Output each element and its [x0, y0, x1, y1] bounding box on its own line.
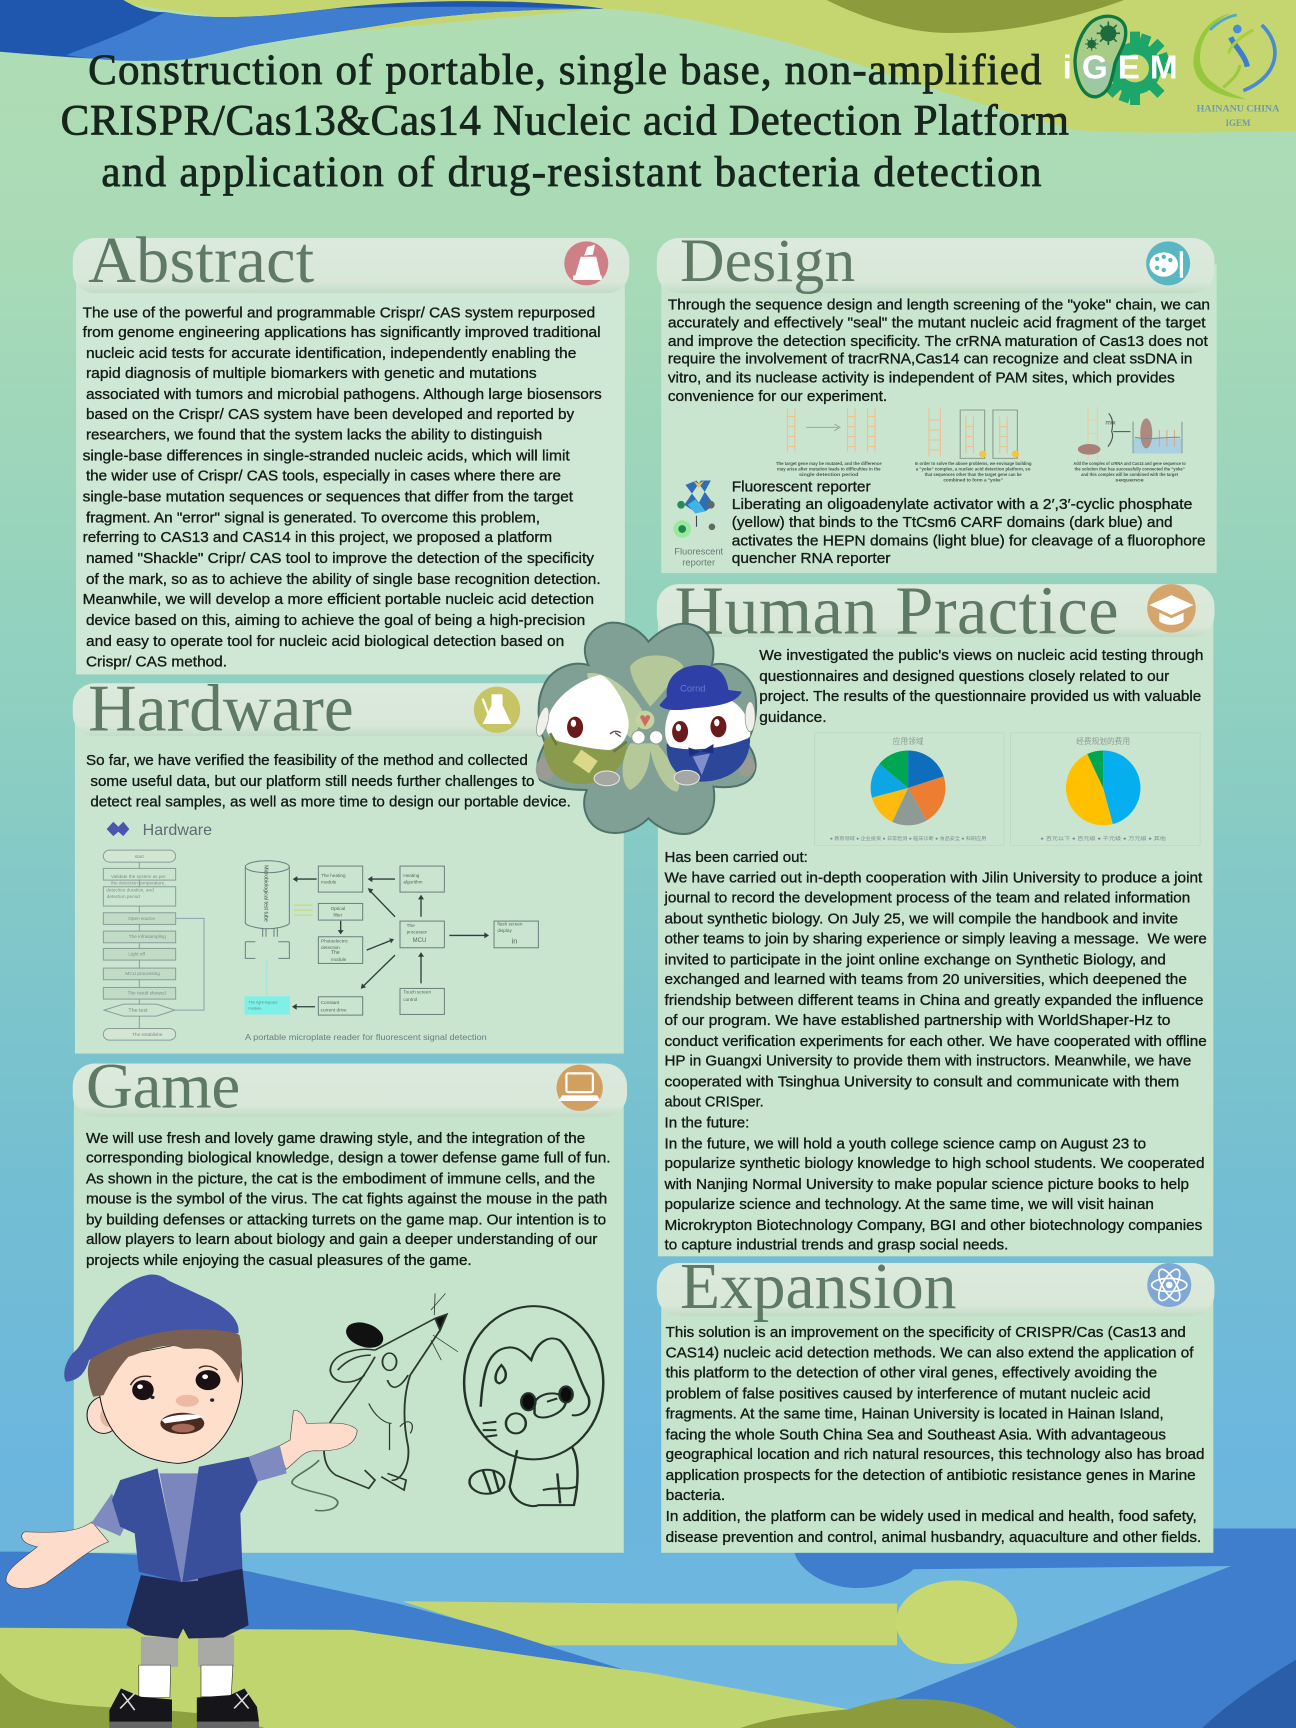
logo: Hainanu China iGEM: IGEM: [1226, 118, 1251, 128]
logo: iGEM: iGEM: [1063, 49, 1178, 86]
text: design body: require the involvement of tracrRNA,Cas14 can recognize and cleat ssDNA in: [668, 351, 1192, 368]
block diagram: portable reader: algorithm: [403, 879, 423, 884]
text: hardware body: some useful data, but our platform still needs further challenges to: [90, 773, 534, 790]
block diagram: portable reader: processor: [407, 929, 428, 934]
text: abstract body: researchers, we found that the system lacks the ability to distinguish: [86, 427, 542, 444]
text: fluorescent reporter: quencher RNA reporter: [732, 550, 890, 567]
icon: book: [564, 241, 608, 285]
clover shape: [537, 623, 756, 834]
caption: step two: In order to solve the above problems, we envisage building: [915, 461, 1032, 467]
text: abstract body: nucleic acid tests for accurate identification, independently enabling the: [86, 345, 576, 362]
text: has been carried out: We have carried out in-depth cooperation with Jilin University to produce a joint: [665, 870, 1203, 887]
text: abstract body: Crispr/ CAS method.: [86, 654, 227, 671]
icon: graduation cap: [1147, 584, 1196, 633]
text: abstract body: of the mark, so as to achieve the ability of single base recognition detection.: [86, 571, 601, 588]
icon: flask: [474, 687, 520, 733]
text: design body: and improve the detection specificity. The crRNA maturation of Cas13 does not: [668, 333, 1209, 350]
block diagram: portable reader: Heating: [403, 873, 420, 878]
panel: hardware: [73, 671, 624, 1054]
text: abstract body: device based on this, aiming to achieve the goal of being a high-precision: [86, 612, 585, 629]
pie chart: budget use: [1011, 733, 1200, 845]
text: game body: As shown in the picture, the cat is the embodiment of immune cells, and the: [86, 1171, 595, 1188]
caption: step three: sequence: [1115, 479, 1144, 484]
caption: step three: and this complex will be combined with the target: [1081, 472, 1178, 478]
panel: design: [657, 227, 1217, 573]
text: fluorescent reporter: Fluorescent reporter: [732, 479, 871, 496]
text: in the future: to capture industrial trends and grasp social needs.: [665, 1237, 1008, 1254]
text: abstract body: The use of the powerful and programmable Crispr/ CAS system repurposed: [83, 304, 595, 321]
text: abstract body: rapid diagnosis of multiple biomarkers with genetic and mutations: [86, 365, 537, 382]
text: abstract body: fragment. An "error" signal is generated. To overcome this problem,: [86, 509, 540, 526]
text: expansion body: geographical location and rich natural resources, this technology also has broad: [666, 1446, 1205, 1463]
text: has been carried out: about synthetic biology. On July 25, we will compile the handbook and invite: [665, 911, 1178, 928]
text: expansion body: In addition, the platform can be widely used in medical and health, food safety,: [666, 1508, 1197, 1525]
block diagram: portable reader: in: [512, 936, 517, 945]
logo: iGEM: [1063, 16, 1178, 105]
pie chart: application fields: 应用领域: [893, 736, 924, 746]
mascots: heart and hands: [632, 711, 663, 744]
text: abstract body: referring to CAS13 and CAS14 in this project, we proposed a platform: [83, 529, 552, 546]
text: fluorescent reporter: Liberating an oligoadenylate activator with a 2′,3′-cyclic phosphate: [732, 496, 1192, 513]
mascots on clover: [534, 623, 756, 834]
text: expansion body: this platform to the detection of other viral genes, effectively avoiding the: [666, 1365, 1157, 1382]
heading: expansion: Expansion: [680, 1251, 957, 1323]
character: boy presenter: [6, 1274, 357, 1728]
block diagram: portable reader: [245, 861, 538, 1015]
block diagram: portable reader: Photoelectric: [321, 938, 349, 943]
text: has been carried out: of our program. We have established partnership with WorldShaper-Hz to: [665, 1012, 1170, 1029]
mascot: left character: [534, 675, 629, 786]
text: fluorescent reporter: [732, 479, 1206, 567]
text: has been carried out: journal to record the development process of the team and related information: [664, 890, 1190, 907]
flow chart steps: [103, 850, 204, 1040]
flow chart steps: MCU processing: [125, 971, 160, 976]
caption: step one: may arise after mutation leads to difficulties in the: [777, 467, 881, 473]
text: design body: vitro, and its nuclease activity is independent of PAM sites, which provides: [668, 369, 1175, 386]
text: game body: corresponding biological knowledge, design a tower defense game full of fun.: [86, 1150, 611, 1167]
block diagram: portable reader: Optical: [331, 906, 345, 911]
text: abstract body: from genome engineering applications has significantly improved traditional: [83, 324, 601, 341]
caption: step one: single detection period: [799, 472, 859, 478]
text: fluorescent reporter: (yellow) that binds to the TtCsm6 CARF domains (dark blue) and: [732, 514, 1173, 531]
text: design body: accurately and effectively "seal" the mutant nucleic acid fragment of the target: [668, 314, 1206, 331]
panel: abstract: [73, 224, 629, 674]
flow chart steps: detection period: [107, 894, 140, 899]
text: questionnaire intro: project. The results of the questionnaire provided us with valuable: [759, 688, 1201, 705]
heading: human practice: Human Practice: [674, 573, 1119, 649]
pie chart: budget use: 经费规划的费用: [1076, 736, 1130, 746]
flow chart steps: Validate the system as per: [111, 874, 166, 879]
block diagram: portable reader: detection: [321, 945, 340, 950]
logo: Hainanu China iGEM: [1193, 13, 1280, 128]
mascot: right character: Cornd: [680, 684, 706, 694]
text: game body: mouse is the symbol of the virus. The cat fights against the mouse in the path: [86, 1190, 607, 1207]
block diagram: portable reader: current drive: [321, 1007, 347, 1012]
logo: Hainanu China iGEM: HAINANU CHINA: [1197, 104, 1280, 114]
block diagram: portable reader: The light-bypass: [248, 999, 278, 1004]
heading: design: Design: [680, 227, 855, 295]
caption: step three: [1073, 461, 1186, 484]
boy head: [64, 1274, 242, 1463]
text: game body: projects while enjoying the casual pleasures of the game.: [86, 1252, 472, 1269]
icon: atom: [1147, 1263, 1191, 1307]
heading: game: Game: [86, 1051, 240, 1123]
text: has been carried out: exchanged and learned with teams from 20 universities, which deepened the: [665, 971, 1187, 988]
flow chart steps: the detection temperature,: [111, 880, 165, 885]
bottom decorative waves: [0, 1529, 1296, 1728]
illustration: mouse: [292, 1293, 458, 1511]
text: has been carried out: about CRISper.: [665, 1093, 764, 1110]
pie chart: application fields: [814, 733, 1004, 845]
caption: step three: the solution that has successfully connected the "yoke": [1074, 467, 1185, 473]
diagram title: Hardware: [143, 822, 212, 839]
heading: abstract: Abstract: [88, 224, 314, 297]
diagram: hardware flow chart: [103, 822, 538, 1042]
text: expansion body: This solution is an improvement on the specificity of CRISPR/Cas (Cas13 and: [666, 1324, 1186, 1341]
text: fluorescent reporter: activates the HEPN domains (light blue) for cleavage of a fluorophore: [732, 533, 1206, 550]
text: game body: [86, 1130, 611, 1269]
block diagram: portable reader: Microbiological test tube: [263, 865, 269, 922]
panel: human practice: [657, 573, 1214, 1256]
pie chart: budget use: ● 百元以下 ● 百元级 ● 千元级 ● 万元级 ● 其他: [1040, 835, 1166, 842]
icon: fluorescent reporter: reporter: [682, 557, 715, 567]
caption: step one: [776, 461, 882, 478]
caption: step two: a "yoke" complex, a nucleic acid detection platform, so: [916, 467, 1030, 473]
caption: step two: [915, 461, 1032, 484]
text: has been carried out: [664, 849, 1207, 1110]
text: has been carried out: conduct verification experiments for each other. We have cooperated with offline: [665, 1033, 1207, 1050]
text: design body: convenience for our experiment.: [668, 388, 887, 405]
text: game body: by building defenses or attacking turrets on the game map. Our intention is to: [86, 1211, 606, 1228]
text: abstract body: single-base mutation sequences or sequences that differ from the target: [83, 488, 574, 505]
text: hardware body: [86, 752, 571, 811]
caption: step three: Add the complex of crRNA and Cas14 and gene sequence to: [1073, 461, 1186, 467]
block diagram: portable reader: The: [331, 950, 340, 956]
text: expansion body: facing the whole South China Sea and Southeast Asia. With advantageous: [666, 1426, 1166, 1443]
text: abstract body: the wider use of Crispr/ CAS tools, especially in cases where there are: [86, 467, 561, 484]
text: expansion body: application prospects for the detection of antibiotic resistance genes in Marine: [666, 1467, 1196, 1484]
block diagram: portable reader: The heating: [321, 873, 346, 878]
text: has been carried out: Has been carried out:: [665, 849, 808, 866]
text: has been carried out: friendship between different teams in China and greatly expanded the influence: [665, 992, 1203, 1009]
text: in the future: popularize science and technology. At the same time, we will visit hainan: [665, 1196, 1154, 1213]
text: in the future: popularize synthetic biology knowledge to high school students. We cooperated: [665, 1155, 1205, 1172]
flow chart steps: The test: [128, 1008, 148, 1014]
block diagram: portable reader: MCU: [413, 938, 426, 944]
text: in the future: Microkrypton Biotechnology Company, BGI and other biotechnology companies: [665, 1217, 1202, 1234]
diagram caption: A portable microplate reader for fluorescent signal detection: [245, 1032, 487, 1042]
text: in the future: [664, 1114, 1205, 1254]
boy shorts: [126, 1568, 249, 1638]
block diagram: portable reader: Constant: [321, 1000, 340, 1005]
text: questionnaire intro: questionnaires and designed questions closely related to our: [759, 668, 1169, 685]
text: expansion body: [666, 1324, 1205, 1546]
text: expansion body: CAS14) nucleic acid detection methods. We can also extend the application of: [666, 1345, 1194, 1362]
icon: palette: [1146, 241, 1190, 285]
top decorative waves: [0, 0, 1296, 133]
text: has been carried out: invited to participate in the joint online exchange on Synthetic Biology, and: [665, 951, 1166, 968]
text: game body: allow players to learn about biology and gain a deeper understanding of our: [86, 1231, 597, 1248]
diagram: yoke design steps: mix: [1105, 419, 1116, 426]
text: expansion body: disease prevention and control, animal husbandry, aquaculture and other fields.: [666, 1529, 1201, 1546]
mascot: right character: [659, 665, 755, 785]
text: abstract body: and easy to operate tool for nucleic acid biological detection based on: [86, 633, 564, 650]
illustration: cat: [464, 1306, 603, 1506]
flow chart steps: start: [135, 854, 145, 859]
caption: step two: combined to form a "yoke": [943, 478, 1003, 484]
pie chart: application fields: ● 教育领域 ● 企业投资 ● 日常检测 ● 临床诊断 ● 食品安全 ● 科研应用: [830, 835, 987, 842]
text: has been carried out: other teams to join by sharing experience or simply leaving a message. We were: [665, 930, 1207, 947]
text: abstract body: Meanwhile, we will develop a more efficient portable nucleic acid detection: [83, 591, 594, 608]
flow chart steps: detection duration, and: [106, 887, 154, 892]
block diagram: portable reader: The: [407, 923, 415, 928]
block diagram: portable reader: flash screen: [497, 921, 523, 926]
text: in the future: In the future:: [665, 1114, 749, 1131]
diagram: yoke design steps: [776, 407, 1186, 484]
heading: hardware: Hardware: [88, 671, 354, 746]
panel: expansion: [657, 1251, 1214, 1553]
text: game body: We will use fresh and lovely game drawing style, and the integration of the: [86, 1130, 585, 1147]
panel: game: [73, 1051, 627, 1553]
text: has been carried out: HP in Guangxi University to provide them with instructors. Meanwhile, we have: [665, 1053, 1191, 1070]
boy legs and shoes: [109, 1635, 259, 1728]
text: questionnaire intro: guidance.: [759, 709, 827, 726]
boy arms: [6, 1410, 357, 1588]
block diagram: portable reader: control: [403, 997, 417, 1002]
caption: step one: The target gene may be mutated, and the difference: [776, 461, 882, 467]
text: abstract body: based on the Crispr/ CAS system have been developed and reported by: [86, 406, 575, 423]
text: in the future: with Nanjing Normal University to make popular science picture books to help: [664, 1176, 1189, 1193]
text: expansion body: fragments. At the same time, Hainan University is located in Hainan Island,: [666, 1405, 1164, 1422]
text: questionnaire intro: We investigated the public's views on nucleic acid testing through: [759, 647, 1203, 664]
icon: fluorescent reporter: [673, 480, 724, 567]
icon: laptop: [557, 1065, 603, 1111]
text: abstract body: single-base differences in single-stranded nucleic acids, which will limit: [83, 448, 571, 465]
title: [61, 47, 1069, 196]
text: abstract body: named "Shackle" Cripr/ CAS tool to improve the detection of the specificity: [86, 550, 595, 567]
text: in the future: In the future, we will hold a youth college science camp on August 23 to: [665, 1135, 1146, 1152]
text: has been carried out: cooperated with Tsinghua University to consult and communicate with them: [665, 1074, 1179, 1091]
text: hardware body: So far, we have verified the feasibility of the method and collected: [86, 752, 528, 769]
block diagram: portable reader: Touch screen: [403, 989, 431, 994]
text: abstract body: [83, 304, 602, 671]
title: and application of drug-resistant bacteria detection: [101, 149, 1041, 196]
text: abstract body: associated with tumors and microbial pathogens. Although large biosensors: [86, 386, 602, 403]
block diagram: portable reader: module: [321, 879, 337, 884]
text: expansion body: problem of false positives caused by interference of mutant nucleic acid: [666, 1385, 1151, 1402]
text: hardware body: detect real samples, as well as more time to design our portable device.: [90, 794, 571, 811]
text: design body: Through the sequence design and length screening of the "yoke" chain, we can: [668, 297, 1210, 314]
flow chart steps: Open source: [128, 916, 155, 921]
block diagram: portable reader: filter: [333, 912, 343, 917]
flow chart steps: Light off: [128, 951, 146, 956]
block diagram: portable reader: display: [497, 928, 513, 933]
boy torso: [112, 1457, 258, 1582]
block diagram: portable reader: module: [248, 1005, 262, 1010]
title: Construction of portable, single base, non-amplified: [88, 47, 1041, 94]
icon: fluorescent reporter: Fluorescent: [674, 546, 724, 556]
icon: diamonds: [107, 822, 129, 836]
text: questionnaire intro: [759, 647, 1203, 726]
title: CRISPR/Cas13&Cas14 Nucleic acid Detection Platform: [61, 97, 1069, 144]
flow chart steps: The result showed: [128, 990, 166, 995]
text: design body: [668, 297, 1210, 405]
caption: step two: that sequences other than the target gene can be: [925, 472, 1022, 478]
block diagram: portable reader: module: [331, 957, 347, 962]
text: expansion body: bacteria.: [666, 1487, 725, 1504]
flow chart steps: The establishe: [132, 1032, 163, 1037]
flow chart steps: The infrasampling: [129, 934, 166, 939]
